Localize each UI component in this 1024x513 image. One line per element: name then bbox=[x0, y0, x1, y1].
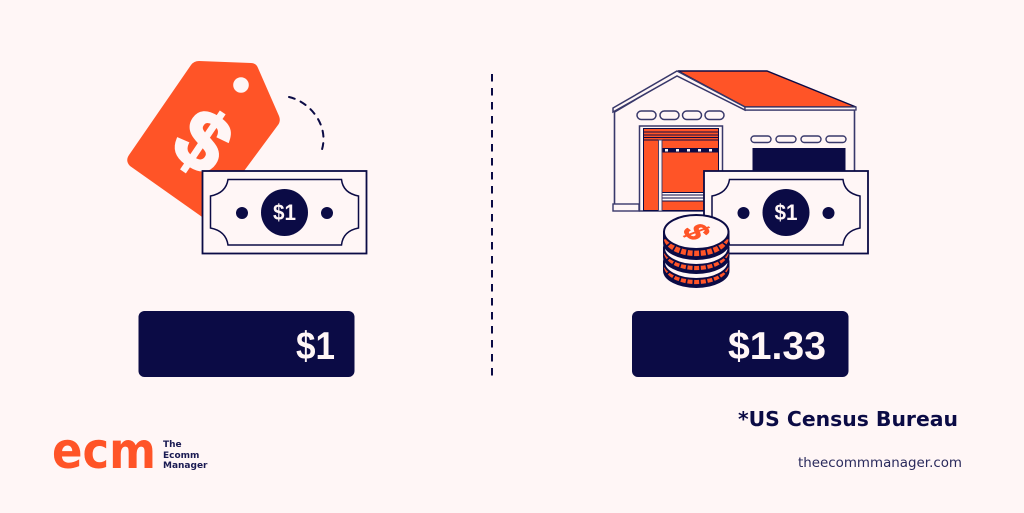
icon: dashed swing arc bbox=[289, 97, 323, 155]
value bar: right bbox=[632, 311, 848, 377]
bill value: $1 bbox=[273, 200, 296, 225]
left windows bbox=[637, 111, 724, 120]
warehouse door bbox=[640, 126, 722, 211]
value: $1: $1 bbox=[296, 325, 335, 368]
logo name: The bbox=[163, 440, 182, 450]
tag dollar sign: $ bbox=[158, 89, 249, 193]
source note: *US Census Bureau bbox=[738, 407, 958, 431]
logo name: Manager bbox=[163, 461, 208, 471]
dark loading bay bbox=[752, 148, 846, 172]
coin dollar sign: $ bbox=[674, 220, 718, 244]
base step bbox=[613, 204, 639, 211]
value: $1.33: $1.33 bbox=[728, 325, 826, 368]
icon: price tag bbox=[127, 61, 280, 219]
bill value: $1 bbox=[774, 200, 798, 225]
website: theecommmanager.com bbox=[798, 456, 962, 471]
icon: dollar bill left bbox=[202, 171, 366, 254]
icon: coin stack bbox=[664, 215, 728, 287]
divider bbox=[491, 74, 493, 378]
middle coin bbox=[664, 231, 728, 273]
value bar: left bbox=[138, 311, 354, 377]
icon: warehouse bbox=[613, 71, 856, 211]
warehouse walls bbox=[614, 75, 854, 210]
logo name: Ecomm bbox=[163, 451, 199, 461]
bottom coin bbox=[664, 245, 728, 287]
warehouse gable trim bbox=[613, 71, 745, 112]
icon: dollar bill right bbox=[704, 171, 868, 254]
logo wordmark: ecm bbox=[52, 422, 156, 480]
right windows bbox=[751, 136, 846, 142]
warehouse roof bbox=[678, 71, 856, 107]
logo bbox=[52, 422, 208, 480]
